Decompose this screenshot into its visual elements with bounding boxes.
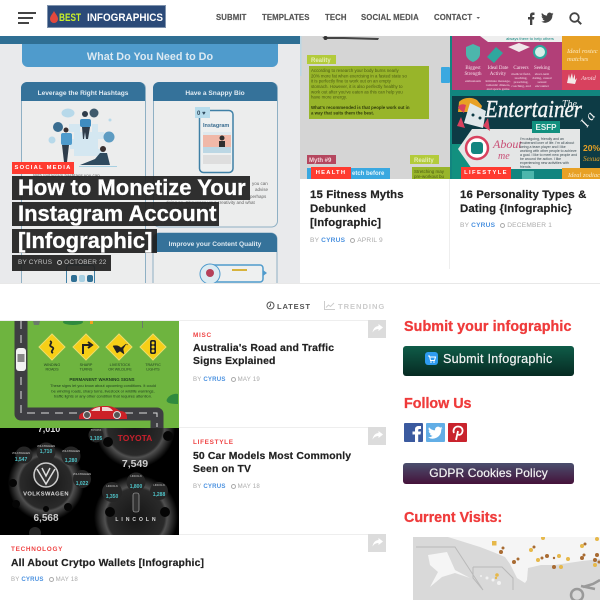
thumbnail: road signs infographic: TURNS — [80, 368, 93, 372]
list item: Australia road signs — [193, 320, 386, 383]
thumbnail: personality types infographic: Ideal zodiac — [567, 172, 600, 179]
icon: cart — [425, 352, 438, 365]
title line 2: Instagram Account — [18, 201, 216, 226]
thumbnail: car models infographic: VOLKSWAGEN — [12, 451, 30, 455]
thumbnail: car models infographic: 6,568 — [33, 513, 59, 524]
category tag: health — [311, 167, 351, 179]
headline — [193, 343, 334, 367]
headline — [193, 451, 352, 475]
button label: GDPR Cookies Policy — [429, 466, 548, 480]
thumbnail: personality types infographic: romantic dinners, — [486, 83, 510, 88]
headline: Signs Explained — [193, 356, 276, 367]
headline: Dating {Infographic} — [460, 203, 572, 215]
thumbnail: fitness myths infographic: Reality — [414, 158, 434, 164]
thumbnail: Instagram infographic — [0, 36, 300, 283]
headline: Seen on TV — [193, 464, 251, 475]
byline — [12, 255, 111, 271]
thumbnail: fitness myths infographic: Reality — [311, 58, 331, 64]
thumbnail: car models infographic: 1,547 — [15, 457, 27, 463]
thumbnail: car models infographic: 1,288 — [153, 492, 165, 498]
headline — [310, 189, 404, 229]
story text: personality — [460, 189, 587, 229]
thumbnail: Instagram infographic: Instagram — [203, 123, 229, 129]
story text: fitness — [310, 189, 404, 244]
thumbnail: personality types infographic: Avoid — [580, 75, 597, 82]
thumbnail: fitness myths infographic: Stretching may — [414, 169, 445, 174]
thumbnail: Instagram infographic: Leverage the Right Hashtags — [38, 90, 129, 97]
thumbnail: fitness myths infographic: What's recommended is that people work out in — [311, 105, 410, 110]
thumbnail: personality types infographic: dating, casual — [532, 76, 552, 81]
thumbnail: personality types infographic: I'm outgoing, friendly and an — [520, 137, 564, 141]
share button — [368, 320, 386, 338]
byline: BY CYRUS MAY 18 — [11, 576, 78, 583]
thumbnail: fitness myths infographic — [300, 36, 450, 179]
thumbnail: personality types infographic: always there to help others — [506, 36, 554, 41]
thumbnail: personality types infographic: enthusiasm — [465, 79, 481, 83]
thumbnail: personality types infographic: short-term — [535, 72, 550, 76]
featured story: personality — [450, 36, 600, 179]
thumbnail: personality types infographic: Biggest — [465, 66, 481, 71]
byline: BY CYRUS DECEMBER 1 — [460, 222, 552, 229]
thumbnail: personality types infographic: exuberant lover of life. I'm all about — [520, 141, 574, 145]
sidebar heading: submit: Submit your infographic — [404, 319, 572, 335]
thumbnail: road signs infographic: TRAFFIC — [145, 363, 161, 367]
category tag: lifestyle: LIFESTYLE — [464, 170, 508, 176]
sidebar heading: current visits: Current Visits: — [404, 510, 502, 526]
thumbnail: personality types infographic: experiencing new activities with — [520, 161, 569, 165]
icon: pinterest square — [448, 423, 467, 442]
thumbnail: car models infographic: LINCOLN — [153, 483, 165, 487]
thumbnail: car models infographic: LINCOLN — [106, 484, 118, 488]
category: TECHNOLOGY — [11, 546, 63, 553]
category tag: health: HEALTH — [316, 170, 346, 176]
thumbnail: fitness myths infographic: have more energy. — [311, 94, 347, 100]
thumbnail: personality types infographic: be around the action. I like — [520, 157, 561, 161]
thumbnail: Instagram infographic: 0 ♥ — [197, 111, 206, 117]
thumbnail: road signs infographic: OR WILDLIFE — [108, 368, 132, 372]
thumbnail: road signs infographic: PERMANENT WARNING SIGNS — [69, 377, 135, 382]
thumbnail: personality types infographic: working with other people to achieve — [520, 149, 577, 153]
icon: trend chart — [324, 301, 335, 310]
thumbnail: Instagram infographic: With Instagram hashtags you can — [33, 173, 100, 178]
thumbnail: car models infographic — [0, 428, 179, 535]
thumbnail: personality types infographic: The — [562, 99, 578, 110]
thumbnail: fitness myths infographic: According to research your body burns nearly — [311, 68, 399, 73]
headline: Debunked — [310, 203, 366, 215]
title line 1: How to Monetize Your — [18, 175, 246, 200]
thumbnail: car models infographic: 1,280 — [65, 458, 77, 464]
icon: facebook square — [404, 423, 423, 442]
thumbnail: Instagram infographic: perhaps — [250, 194, 267, 199]
icon: facebook — [528, 12, 534, 25]
thumbnail: personality types infographic: coaching, and — [511, 84, 531, 89]
social icons — [404, 423, 467, 442]
thumbnail: Instagram infographic: doing so. Showcase your creativity and what — [166, 200, 256, 205]
list item: car models — [193, 427, 386, 490]
thumbnail: fitness myths infographic: work out after you've eaten as this can help you — [311, 90, 403, 94]
logo — [47, 5, 166, 28]
thumbnail: personality types infographic: Seeking — [534, 66, 551, 71]
headline: [Infographic] — [310, 217, 381, 229]
nav: contact: CONTACT — [434, 13, 472, 22]
byline text: BY CYRUS OCTOBER 22 — [18, 259, 107, 266]
thumbnail: car models infographic: 1,710 — [40, 449, 52, 455]
thumbnail: personality types infographic: and sports game — [487, 87, 510, 91]
tab: trending: TRENDING — [338, 302, 385, 311]
thumbnail: personality types infographic: 20% — [583, 143, 600, 153]
thumbnail: personality types infographic: About — [492, 137, 522, 151]
byline: BY CYRUS APRIL 9 — [310, 237, 383, 244]
featured story: fitness — [300, 36, 450, 179]
thumbnail: personality types infographic: friends. — [520, 165, 532, 169]
headline: 15 Fitness Myths — [310, 189, 404, 201]
thumbnail: personality types infographic: I a — [577, 109, 599, 131]
button: GDPR cookies policy — [403, 463, 574, 484]
thumbnail: road signs infographic — [0, 321, 179, 428]
thumbnail: fitness myths infographic: it is perfectly fine to work out on an empty — [311, 78, 392, 84]
category: MISC — [193, 332, 212, 339]
nav: submit: SUBMIT — [216, 13, 246, 22]
sidebar heading: follow us: Follow Us — [404, 396, 472, 412]
thumbnail: road signs infographic: be winding roads, sharp turns, livestock or wildlife warnings, — [51, 388, 155, 394]
thumbnail: fitness myths infographic: stomach. However, it is also perfectly healthy to — [311, 84, 403, 89]
thumbnail: personality types infographic: ESFP — [536, 123, 557, 132]
thumbnail: road signs infographic: SHARP — [80, 363, 93, 367]
thumbnail: personality types infographic: Ideal Date — [488, 66, 509, 71]
thumbnail: fitness myths infographic: 20% more fat when exercising in a fasted state so — [311, 74, 407, 78]
thumbnail: car models infographic: LINCOLN — [115, 517, 159, 523]
thumbnail: car models infographic: TOYOTA — [91, 428, 101, 432]
thumbnail: car models infographic: 1,350 — [106, 494, 118, 500]
thumbnail: personality types infographic: Ideal rostec — [566, 48, 598, 55]
thumbnail: car models infographic: VOLKSWAGEN — [23, 492, 69, 498]
share button — [368, 534, 386, 552]
thumbnail: Instagram infographic: you can add to them. — [175, 206, 217, 211]
thumbnail: personality types infographic: a goal. I like to meet new people and — [520, 153, 577, 157]
thumbnail: car models infographic: 1,022 — [76, 481, 88, 487]
thumbnail: personality types infographic: encounter — [535, 84, 550, 88]
headline: Australia's Road and Traffic — [193, 343, 334, 354]
icon: clock — [266, 302, 274, 310]
icon: share arrow — [372, 538, 383, 546]
nav: tech: TECH — [325, 13, 347, 22]
icon: share arrow — [372, 431, 383, 439]
tabs: latest and trending — [266, 301, 385, 311]
category tag: social media — [12, 162, 74, 174]
thumbnail: road signs infographic: LIGHTS — [146, 368, 160, 372]
thumbnail: car models infographic: LINCOLN — [130, 474, 142, 478]
thumbnail: car models infographic: VOLKSWAGEN — [37, 444, 55, 448]
tab: latest: LATEST — [277, 302, 311, 311]
thumbnail: car models infographic: 1,105 — [90, 436, 102, 442]
featured story: Instagram — [0, 36, 300, 284]
thumbnail: fitness myths infographic: a way that suits them the best. — [311, 110, 374, 116]
icon: twitter — [541, 12, 554, 23]
thumbnail: car models infographic: 7,549 — [122, 458, 148, 470]
list item: crypto wallets — [11, 534, 386, 583]
logo: BEST — [59, 12, 81, 24]
category: LIFESTYLE — [193, 439, 234, 446]
thumbnail: personality types infographic: preaching, — [514, 80, 528, 85]
button label: Submit Infographic — [443, 352, 553, 366]
thumbnail: fitness myths infographic: etch before — [352, 171, 385, 177]
thumbnail: Instagram infographic: advise — [255, 187, 269, 192]
icon: twitter square — [426, 423, 445, 442]
thumbnail: Instagram infographic: Have a Snappy Bio — [185, 90, 245, 97]
thumbnail: personality types infographic: matches — [567, 56, 589, 63]
share button — [368, 427, 386, 445]
thumbnail: personality types infographic: medical field, — [511, 72, 531, 77]
icon: dropdown arrow — [476, 17, 480, 19]
thumbnail: personality types infographic — [452, 36, 600, 179]
thumbnail: road signs infographic: traffic lights or any other condition that requires attention. — [54, 394, 152, 398]
thumbnail: personality types infographic: Entertainer — [484, 97, 583, 123]
icon: search — [569, 12, 582, 25]
icon: share arrow — [372, 324, 383, 332]
thumbnail: personality types infographic: being a team player and I like — [520, 145, 566, 149]
thumbnail: personality types infographic: intimate massage, — [485, 79, 511, 84]
thumbnail: Instagram infographic: Improve your Content Quality — [169, 241, 262, 248]
button: submit infographic — [403, 346, 574, 376]
thumbnail: road signs infographic: WINDING — [44, 363, 60, 367]
headline — [460, 189, 587, 215]
thumbnail: Instagram infographic: What Do You Need to Do — [87, 51, 213, 63]
thumbnail: personality types infographic: Strength — [465, 72, 482, 77]
thumbnail: road signs infographic: LIVESTOCK — [110, 363, 131, 367]
thumbnail: personality types infographic: teaching, — [515, 76, 527, 81]
thumbnail: personality types infographic: me — [498, 151, 510, 162]
headline: 16 Personality Types & — [460, 189, 587, 201]
header bar — [0, 0, 600, 36]
byline: BY CYRUS MAY 19 — [193, 376, 260, 383]
thumbnail: car models infographic: VOLKSWAGEN — [62, 449, 80, 453]
thumbnail: road signs infographic: ROADS — [45, 368, 59, 372]
thumbnail: car models infographic: TOYOTA — [118, 433, 152, 443]
headline: All About Crytpo Wallets [Infographic] — [11, 558, 204, 569]
map: visitor locations — [413, 537, 600, 600]
nav: templates: TEMPLATES — [262, 13, 310, 22]
thumbnail: fitness myths infographic: Myth #9 — [309, 158, 332, 164]
thumbnail: car models infographic: 1,800 — [130, 484, 142, 490]
byline: BY CYRUS MAY 18 — [193, 483, 260, 490]
thumbnail: personality types infographic: Activity — [490, 72, 507, 77]
thumbnail: car models infographic: VOLKSWAGEN — [73, 472, 91, 476]
nav: social media: SOCIAL MEDIA — [361, 13, 419, 22]
thumbnail: Instagram infographic: you can — [252, 181, 268, 186]
category tag: social media: SOCIAL MEDIA — [14, 165, 72, 171]
icon: hamburger menu — [18, 12, 36, 24]
category tag: lifestyle — [461, 167, 511, 179]
headline: 50 Car Models Most Commonly — [193, 451, 351, 462]
thumbnail: personality types infographic: Careers — [513, 66, 529, 71]
thumbnail: road signs infographic: These signs let you know about upcoming conditions. It could — [50, 383, 156, 388]
thumbnail: fitness myths infographic: pre-workout bu — [414, 174, 445, 179]
thumbnail: personality types infographic: sexual — [538, 80, 546, 84]
title line 3: [Infographic] — [18, 228, 152, 253]
